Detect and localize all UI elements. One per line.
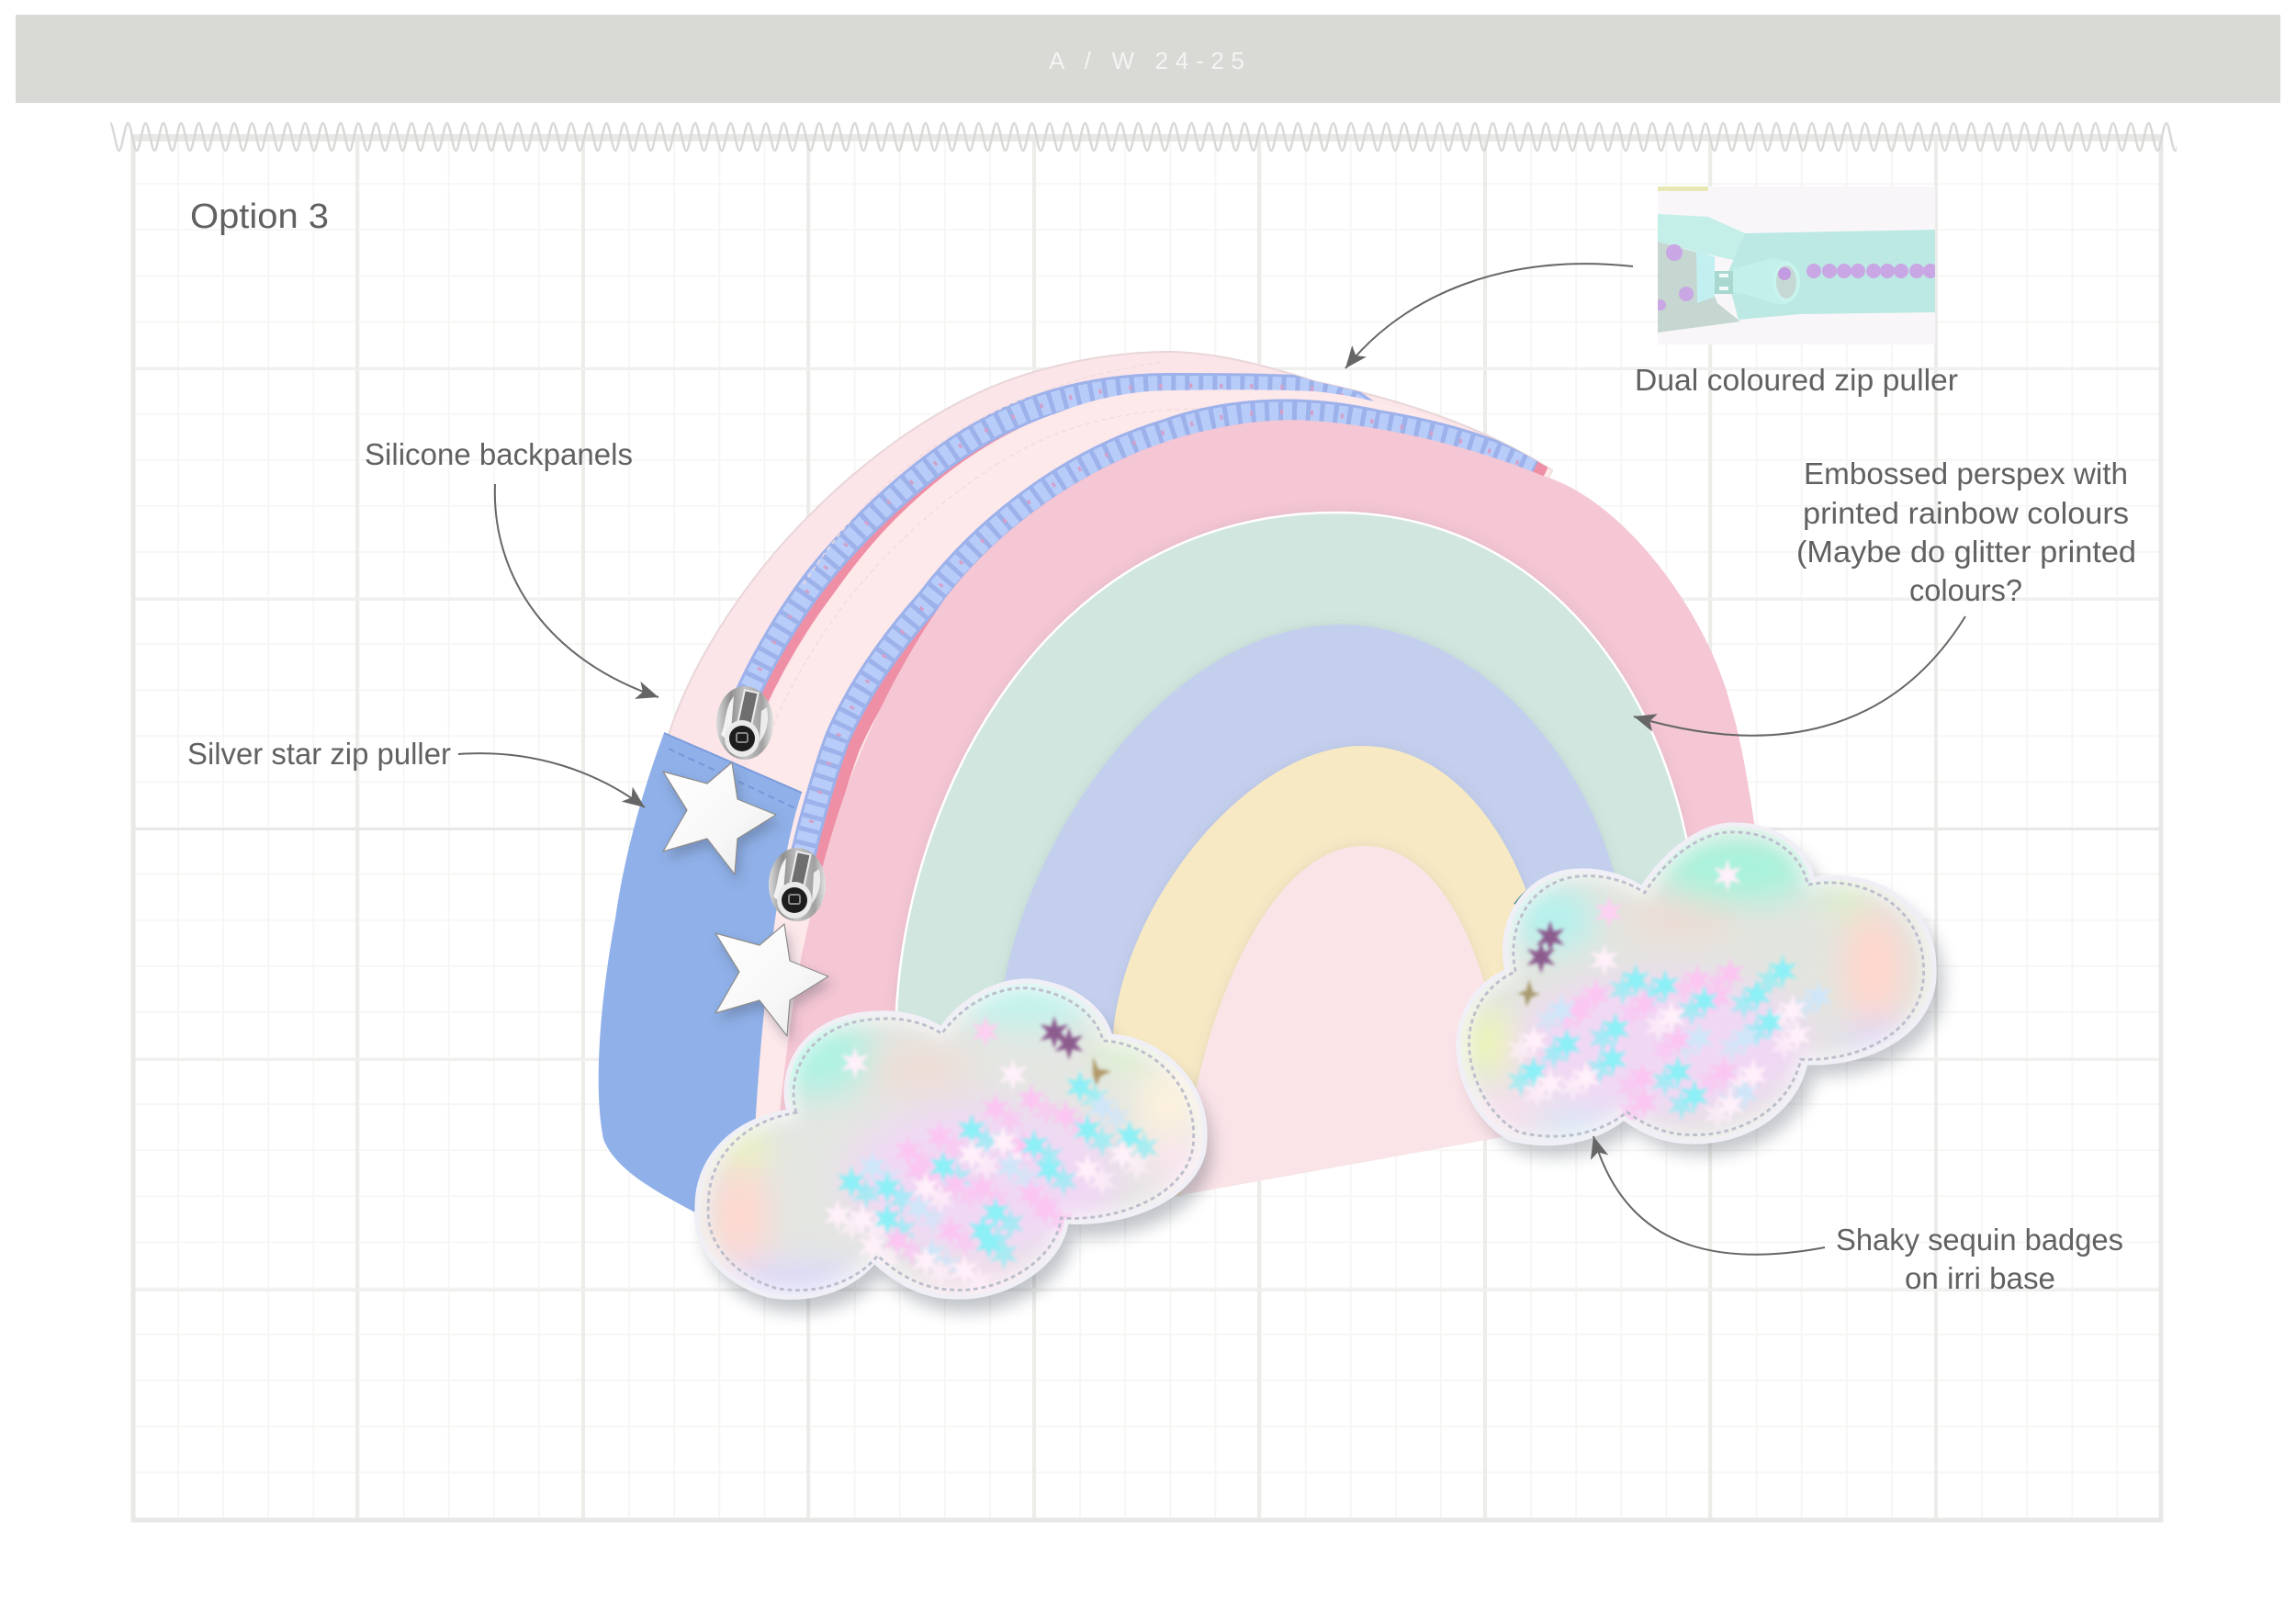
graph paper background bbox=[133, 138, 2161, 1520]
title: Option 3: Option 3 bbox=[190, 197, 329, 236]
caption: shaky sequin badges: Shaky sequin badges bbox=[1836, 1223, 2123, 1257]
caption: shaky sequin badges: on irri base bbox=[1905, 1261, 2055, 1295]
caption: shaky sequin badges bbox=[1836, 1223, 2123, 1295]
back panel: blue silicone bbox=[599, 733, 802, 1212]
caption: embossed perspex: printed rainbow colours bbox=[1803, 496, 2129, 530]
gap shade bbox=[1658, 242, 1740, 333]
season label: A / W 24-25 bbox=[1049, 47, 1244, 74]
caption: embossed perspex bbox=[1796, 457, 2136, 607]
spiral binding bbox=[110, 121, 2177, 152]
caption: embossed perspex: (Maybe do glitter printed bbox=[1796, 535, 2136, 569]
caption: silver star zip puller: Silver star zip puller bbox=[187, 737, 451, 771]
arch: inner pale pink bbox=[1181, 845, 1503, 1195]
main tape bbox=[1727, 230, 1935, 320]
zip puller top bbox=[663, 686, 776, 874]
teeth bbox=[1655, 244, 1938, 310]
upper-left tape bbox=[1658, 214, 1745, 260]
sequin cloud badge left bbox=[697, 976, 1212, 1312]
sequins left bbox=[823, 1015, 1159, 1298]
middle shell stitching bbox=[764, 409, 1398, 749]
caption: silicone backpanels: Silicone backpanels bbox=[365, 437, 633, 471]
arch: lavender bbox=[1005, 625, 1615, 1034]
arch: green bbox=[895, 511, 1688, 1025]
caption: embossed perspex: colours? bbox=[1909, 573, 2022, 607]
arrow: sequin badges bbox=[1593, 1136, 1825, 1255]
slider bbox=[1696, 251, 1715, 303]
arrow: silver star zip puller bbox=[458, 753, 645, 807]
back shell bbox=[666, 352, 1552, 919]
second zip bbox=[797, 412, 1543, 889]
white rim glow bbox=[697, 981, 1205, 1297]
arrow: silicone backpanels bbox=[495, 484, 658, 697]
middle shell bbox=[744, 389, 1552, 1194]
caption: embossed perspex: Embossed perspex with bbox=[1804, 457, 2128, 491]
sequins right bbox=[1506, 859, 1833, 1131]
first zip bbox=[735, 362, 1376, 732]
star charm 2 bbox=[715, 924, 828, 1036]
puller head bbox=[716, 686, 773, 760]
front rainbow panel bbox=[780, 420, 1754, 1196]
arrow: embossed perspex bbox=[1634, 616, 1965, 736]
header banner bbox=[16, 15, 2280, 103]
cloud rim and stitching bbox=[697, 981, 1205, 1297]
rainbow bag illustration bbox=[599, 352, 1777, 1286]
white rim glow bbox=[1458, 825, 1934, 1144]
zip puller bottom bbox=[715, 848, 828, 1036]
arch: yellow bbox=[1113, 746, 1526, 1196]
arrow: zip puller bbox=[1345, 264, 1633, 368]
puller head 2 bbox=[769, 848, 826, 921]
star charm bbox=[663, 762, 776, 874]
caption: dual coloured zip puller: Dual coloured zip puller bbox=[1635, 363, 1958, 397]
cloud rim and stitching bbox=[1458, 825, 1934, 1144]
sequin cloud badge right bbox=[1458, 825, 1943, 1156]
photo: dual coloured zip bbox=[1655, 186, 1938, 344]
